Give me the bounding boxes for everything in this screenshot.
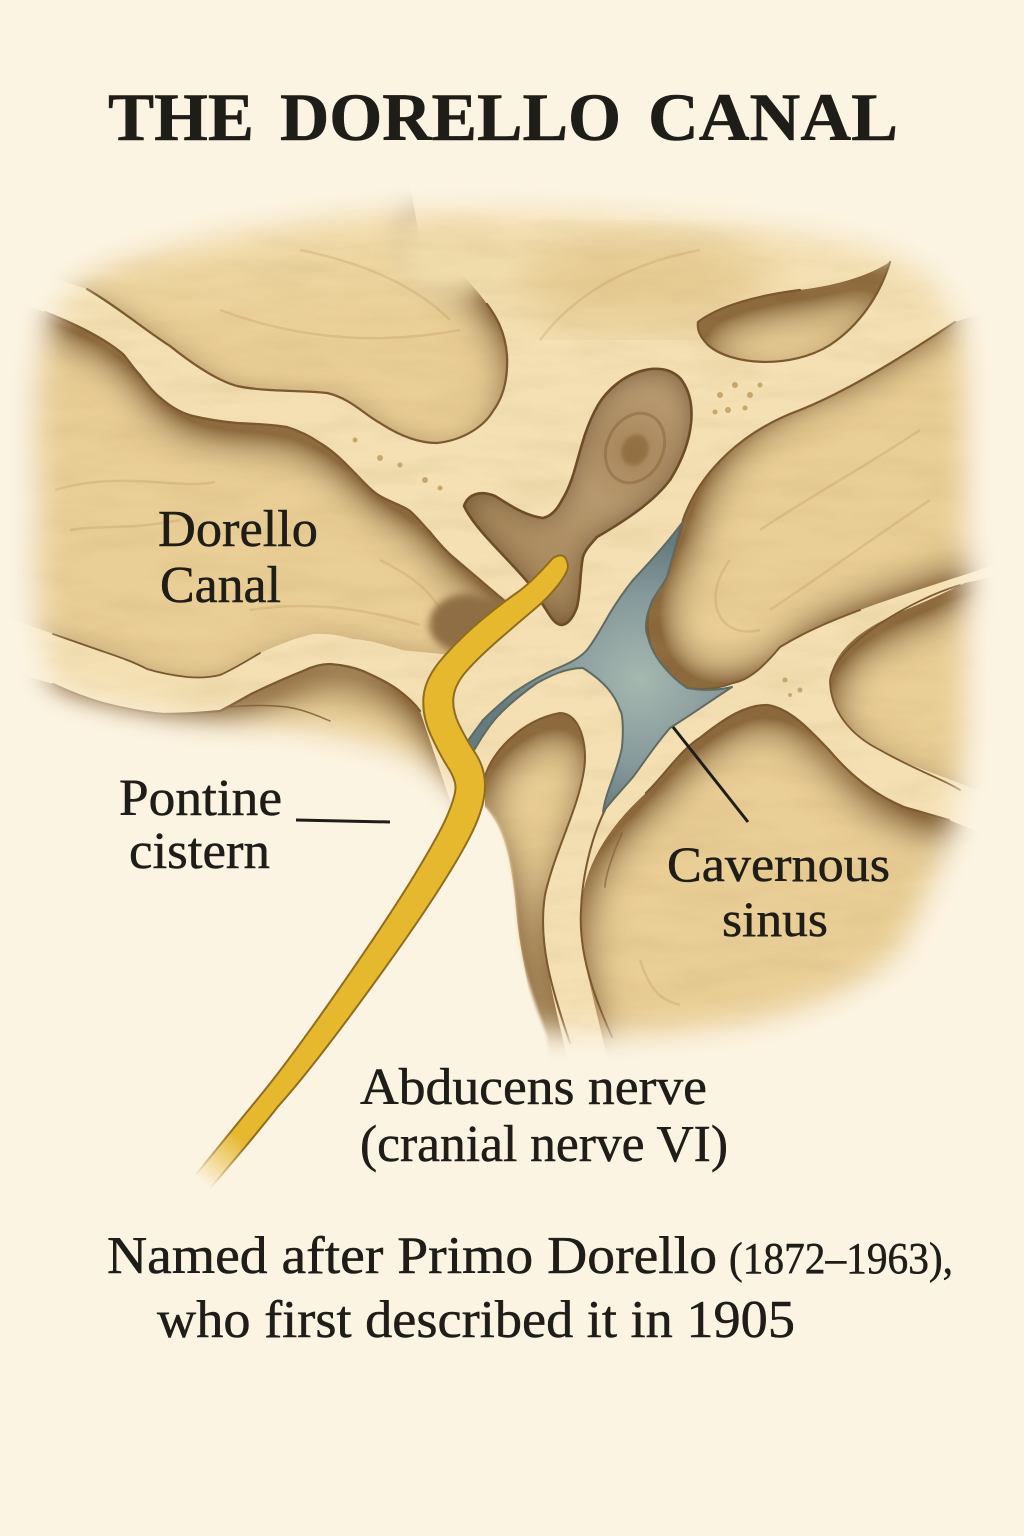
- caption: Named after Primo Dorello: [107, 1227, 717, 1285]
- bone base: [30, 198, 978, 1046]
- texture overlay: [114, 264, 904, 832]
- label: Pontine cistern: Pontine: [119, 770, 282, 827]
- dark outlines: [45, 262, 960, 1043]
- label: Pontine cistern: [119, 770, 282, 880]
- caption: [107, 1227, 953, 1349]
- canal opening shadow: [429, 594, 507, 655]
- brown keyhole structure: [464, 369, 691, 625]
- right tan region: [648, 318, 984, 688]
- title: DORELLO: [280, 79, 621, 155]
- caption: who first described it in 1905: [157, 1291, 795, 1349]
- label: Cavernous sinus: [667, 836, 890, 947]
- label: Abducens nerve: Abducens nerve: [360, 1059, 707, 1116]
- upper left region: [66, 198, 506, 442]
- label: Abducens nerve: [360, 1059, 728, 1173]
- title: THE: [108, 79, 254, 155]
- label: Cavernous sinus: sinus: [722, 891, 828, 947]
- caption: (1872–1963),: [729, 1234, 953, 1283]
- label: Dorello Canal: Canal: [160, 557, 281, 614]
- bone and tissue shading: [19, 193, 987, 1054]
- label: Cavernous sinus: Cavernous: [667, 836, 890, 892]
- title: CANAL: [648, 79, 898, 155]
- blended top of upper left region: [396, 209, 486, 306]
- anatomical illustration: [19, 193, 987, 1188]
- faint grain lines: [55, 250, 930, 1005]
- bone pores: [352, 382, 802, 697]
- label: Abducens nerve: (cranial nerve VI): [360, 1116, 728, 1173]
- title: [108, 79, 898, 155]
- leader line: pontine cistern: [296, 820, 390, 822]
- cavernous sinus: [467, 523, 732, 812]
- cream cut-out below the bone: [400, 800, 552, 1110]
- upper central tone: [510, 230, 770, 330]
- tan soft tissue regions: [26, 262, 985, 1050]
- label: Pontine cistern: cistern: [129, 823, 270, 880]
- label: Dorello Canal: Dorello: [158, 501, 318, 558]
- leader line: cavernous sinus: [673, 727, 748, 822]
- label: Dorello Canal: [158, 501, 318, 614]
- abducens nerve: [193, 555, 568, 1192]
